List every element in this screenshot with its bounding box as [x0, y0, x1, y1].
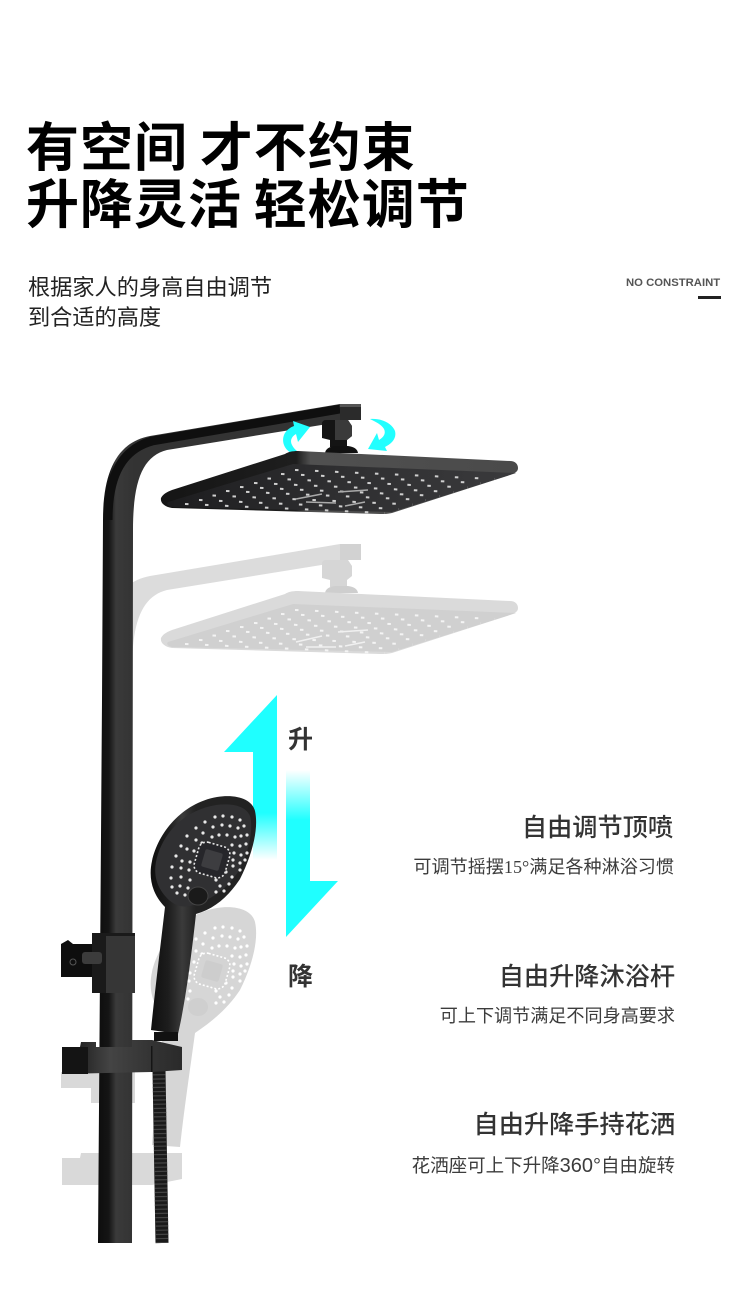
feature 2 heading: 自由升降沐浴杆 [499, 963, 675, 991]
title: 有空间 才不约束 [26, 119, 416, 178]
arm cap [340, 404, 361, 420]
ghost: lower hand shower [151, 907, 256, 1147]
hose [159, 1070, 162, 1243]
feature 3 text: 花洒座可上下升降360°自由旋转 [412, 1155, 675, 1177]
feature 1 heading: 自由调节顶喷 [522, 814, 673, 842]
centre nozzle [296, 490, 368, 506]
hand shower holder [62, 1032, 182, 1074]
ghost: lower sliders [61, 1072, 182, 1185]
feature 2 text: 可上下调节满足不同身高要求 [440, 1006, 675, 1026]
rail and top arm [98, 404, 361, 1243]
rotation arrows [283, 419, 395, 457]
subtitle text [28, 275, 272, 330]
title: 升降灵活 轻松调节 [26, 176, 470, 235]
label: no constraint: NO CONSTRAINT [626, 277, 720, 289]
upper slider bracket [61, 933, 135, 993]
label: fall: 降 [288, 963, 313, 991]
hand shower [151, 796, 256, 1034]
title [26, 119, 470, 235]
label: rise: 升 [288, 726, 313, 754]
feature 1 text: 可调节摇摆15°满足各种淋浴习惯 [413, 857, 674, 877]
button [188, 887, 208, 905]
subtitle text: 到合适的高度 [28, 304, 161, 330]
centre square [192, 840, 232, 880]
subtitle text: 根据家人的身高自由调节 [28, 275, 272, 300]
direction arrows [224, 695, 338, 937]
feature 3 heading: 自由升降手持花洒 [474, 1111, 675, 1139]
shower head [161, 420, 518, 514]
ghost: lower top arm and head [103, 544, 518, 670]
accent bar [698, 296, 721, 299]
